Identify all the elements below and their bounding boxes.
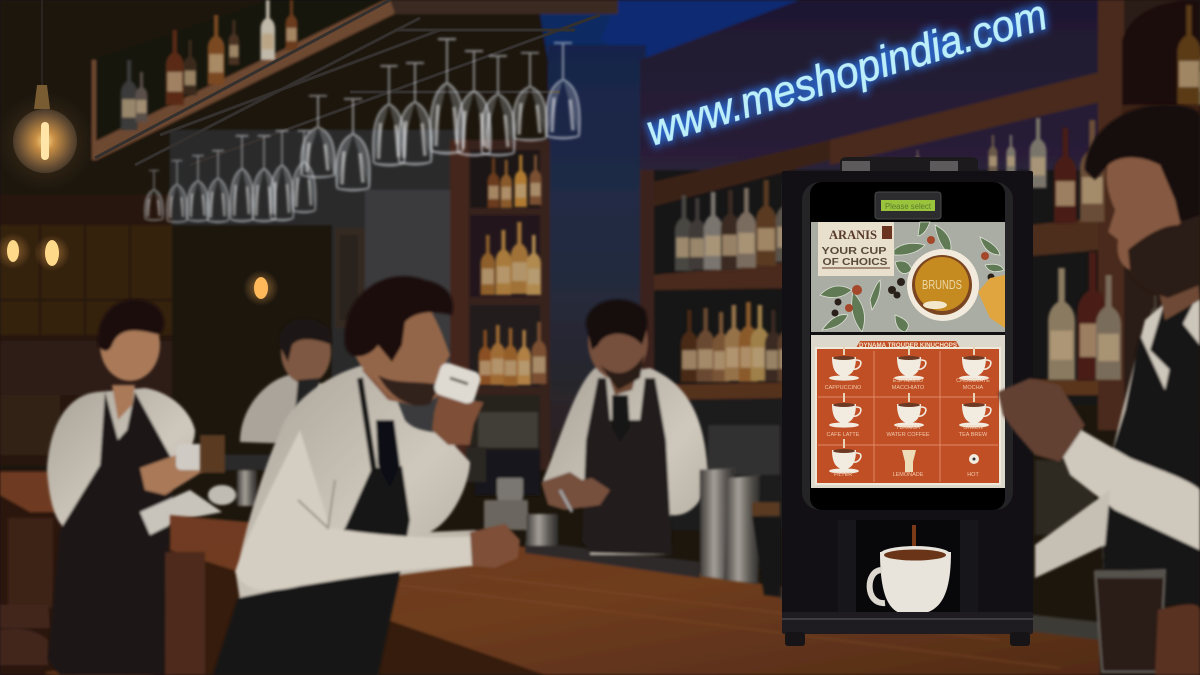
- person: woman at back left: [47, 299, 222, 675]
- ceiling blue: [540, 14, 800, 60]
- shelf unit mid: [450, 140, 550, 470]
- foreground glass right: [1095, 570, 1200, 675]
- sleeve: [235, 430, 476, 590]
- bezel: [802, 182, 1013, 510]
- person: barista centre: [541, 299, 708, 555]
- drink menu panel: [811, 335, 1005, 488]
- torso: [236, 366, 476, 600]
- bottles: top-left shelf: [121, 0, 298, 130]
- tie: [376, 420, 400, 488]
- bar items on counter: [200, 425, 1095, 597]
- coffee cup: [870, 546, 951, 613]
- grey wall section: [365, 190, 455, 460]
- hand on counter: [470, 524, 520, 568]
- main counter: [165, 515, 1100, 675]
- illustrated hand: [978, 275, 1005, 328]
- menu labels: CHOCOLATE: [956, 378, 990, 384]
- label card: OF CHOICS: [822, 256, 888, 268]
- menu labels: CAPPUCCINO: [825, 385, 862, 391]
- label card: [818, 222, 894, 276]
- raised hand: [432, 385, 484, 445]
- menu labels: HOT: [967, 472, 979, 478]
- tie: [1150, 300, 1195, 370]
- menu icons: [829, 346, 991, 474]
- beard: [1128, 205, 1200, 298]
- menu labels: ESPRESSO: [893, 378, 924, 384]
- neon sign: [641, 0, 1053, 156]
- pendant lamps: [0, 0, 279, 306]
- bottles: mid shelf unit: [478, 155, 546, 448]
- hanging wine glasses: [145, 39, 580, 222]
- right wall column: [1098, 0, 1200, 430]
- coffee machine: [782, 157, 1033, 646]
- menu labels: [825, 378, 990, 478]
- menu labels: LEMONADE: [893, 472, 924, 478]
- dispense bay: [838, 520, 978, 612]
- person: man behind left: [240, 319, 332, 445]
- arm: [1062, 428, 1200, 550]
- glass rack: [95, 0, 600, 165]
- coffee cup top view: [907, 249, 979, 321]
- menu labels: GREEN: [963, 425, 983, 431]
- menu labels: FILTER: [834, 472, 852, 478]
- coffee cup top view: BRUNDS: [922, 277, 962, 292]
- menu labels: MOCHA: [963, 385, 984, 391]
- menu labels: MACCHIATO: [892, 385, 925, 391]
- drink menu panel: DYNAMA TROUDER KINUCHOPS: [859, 342, 958, 349]
- berries and beans: [832, 236, 994, 316]
- menu labels: CAFE LATTE: [827, 432, 860, 438]
- left counter: [0, 470, 170, 675]
- neck: [1150, 240, 1200, 320]
- apron: [213, 466, 410, 675]
- back wall centre: [170, 130, 460, 470]
- hair: [345, 276, 453, 362]
- torso: [1100, 290, 1200, 600]
- menu labels: WATER COFFEE: [886, 432, 930, 438]
- menu labels: TURKISH: [896, 425, 920, 431]
- menu labels: TEA BREW: [959, 432, 988, 438]
- bottles: back bar shelves: [675, 5, 1200, 382]
- face: [1106, 150, 1200, 295]
- drip tray: [782, 612, 1033, 646]
- machine body: [782, 171, 1033, 623]
- person: barista right: [998, 104, 1200, 605]
- leaves: [820, 222, 1004, 332]
- doorway centre: [172, 225, 332, 455]
- blue column: [548, 45, 646, 455]
- hand on machine: [998, 378, 1085, 462]
- label card: YOUR CUP: [822, 245, 886, 257]
- face: [350, 297, 450, 404]
- back bar shelves: [640, 72, 1100, 530]
- apron: [1100, 320, 1200, 605]
- neck: [362, 360, 412, 405]
- wood panel wall left: [0, 195, 172, 465]
- divider: [811, 332, 1005, 335]
- cup: [432, 361, 483, 405]
- display: Please select: [885, 202, 932, 211]
- poster panel: [811, 222, 1005, 332]
- machine top cap: [840, 157, 978, 172]
- sign panel: [640, 0, 1100, 170]
- display: [875, 192, 941, 219]
- person: main man sipping coffee: [213, 276, 520, 675]
- hair: [1085, 104, 1200, 222]
- top-left shelf: [92, 0, 618, 160]
- label card: ARANIS: [829, 227, 877, 242]
